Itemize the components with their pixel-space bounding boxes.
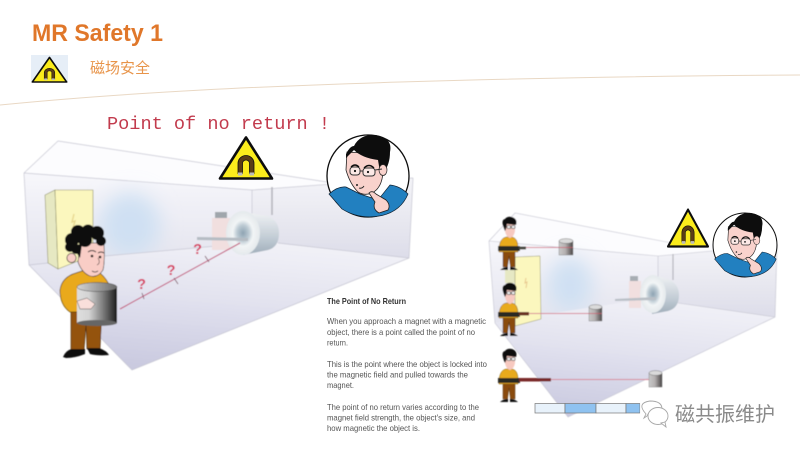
text heading: The Point of No Return [327,296,406,306]
icon: right magnet warning [668,210,708,246]
door [45,190,93,269]
text block: the point of no return [327,296,487,433]
paragraph 2: This is the point where the object is locked into [327,359,487,369]
distance line [120,243,240,309]
man with long chain [498,349,662,402]
thinking engineer portrait [327,135,409,217]
paragraph 1: When you approach a magnet with a magnetic [327,316,486,326]
title: MR Safety 1 [32,20,163,47]
left room illustration [24,141,413,370]
right engineer portrait [713,213,777,277]
watermark: 磁共振维护 [675,403,775,426]
paragraph 3 [327,402,479,433]
paragraph 2: magnet. [327,380,354,390]
man holding metal cylinder [60,224,117,358]
right room illustration [489,213,777,417]
paragraph 3: The point of no return varies according to the [327,402,479,412]
question marks: ? [167,263,176,279]
watermark [640,398,778,428]
man with short chain [498,217,573,270]
heading: point of no return: Point of no return ! [107,114,330,135]
question marks: ? [193,242,202,258]
progress bar [535,404,640,413]
room walls and floor [24,141,413,370]
subtitle: 磁场安全 [90,59,150,77]
MRI scanner [615,254,679,314]
room walls and floor [489,213,777,417]
header divider [0,75,800,105]
paragraph 2: the magnetic field and pulled towards the [327,370,468,380]
icon: small magnet warning [31,55,68,82]
icon: large magnet warning [220,138,272,178]
paragraph 1: return. [327,338,348,348]
MRI scanner [197,187,279,255]
paragraph 2 [327,359,487,390]
question marks: ? [137,277,146,293]
question marks [137,242,202,293]
man with medium chain [498,283,602,336]
paragraph 1 [327,316,486,348]
paragraph 1: object, there is a point called the point of no [327,327,475,337]
door [505,256,541,326]
paragraph 3: magnet field strength, the object's size, and [327,412,475,422]
icon: chat bubbles [642,401,668,427]
paragraph 3: how magnetic the object is. [327,423,420,433]
